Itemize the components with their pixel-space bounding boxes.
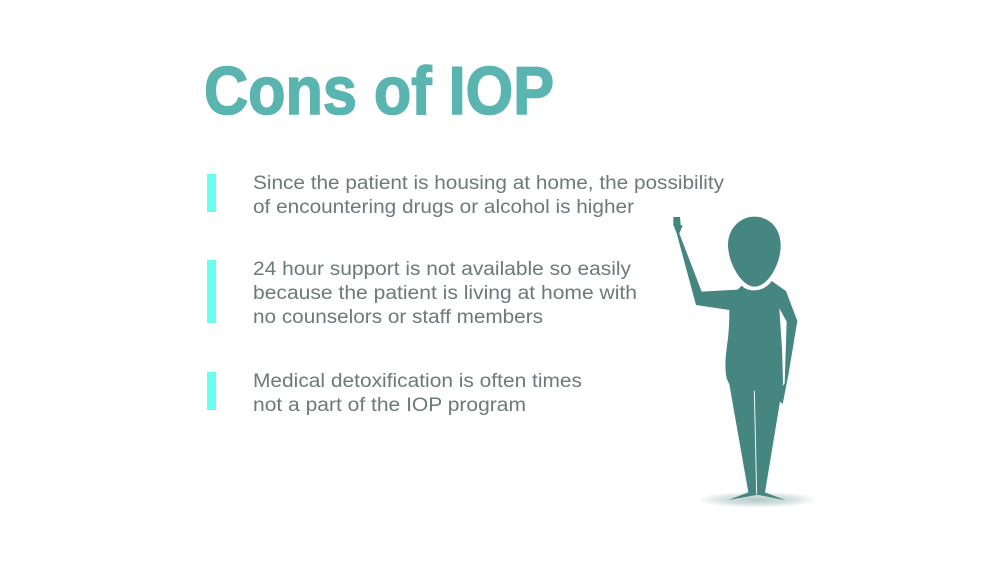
- text block 1: [253, 173, 725, 218]
- ground shadow: [697, 492, 818, 508]
- body: [673, 217, 797, 500]
- text block 3: not a part of the IOP program: [253, 395, 526, 416]
- text block 3: [253, 371, 582, 416]
- text block 2: because the patient is living at home with: [253, 283, 637, 304]
- text block 2: [253, 259, 637, 328]
- text block 2: no counselors or staff members: [253, 307, 543, 328]
- figure: person with raised hand: [673, 217, 818, 508]
- head: [728, 217, 781, 287]
- title: Cons of IOP: [204, 53, 554, 129]
- text block 2: 24 hour support is not available so easily: [253, 259, 632, 280]
- bullet bar 3: [207, 372, 216, 410]
- text block 3: Medical detoxification is often times: [253, 371, 582, 392]
- leg gap: [754, 391, 757, 494]
- bullet bar 1: [207, 174, 216, 212]
- text block 1: of encountering drugs or alcohol is higher: [253, 197, 635, 218]
- text block 1: Since the patient is housing at home, the possibility: [253, 173, 725, 194]
- bullet bar 2: [207, 260, 216, 323]
